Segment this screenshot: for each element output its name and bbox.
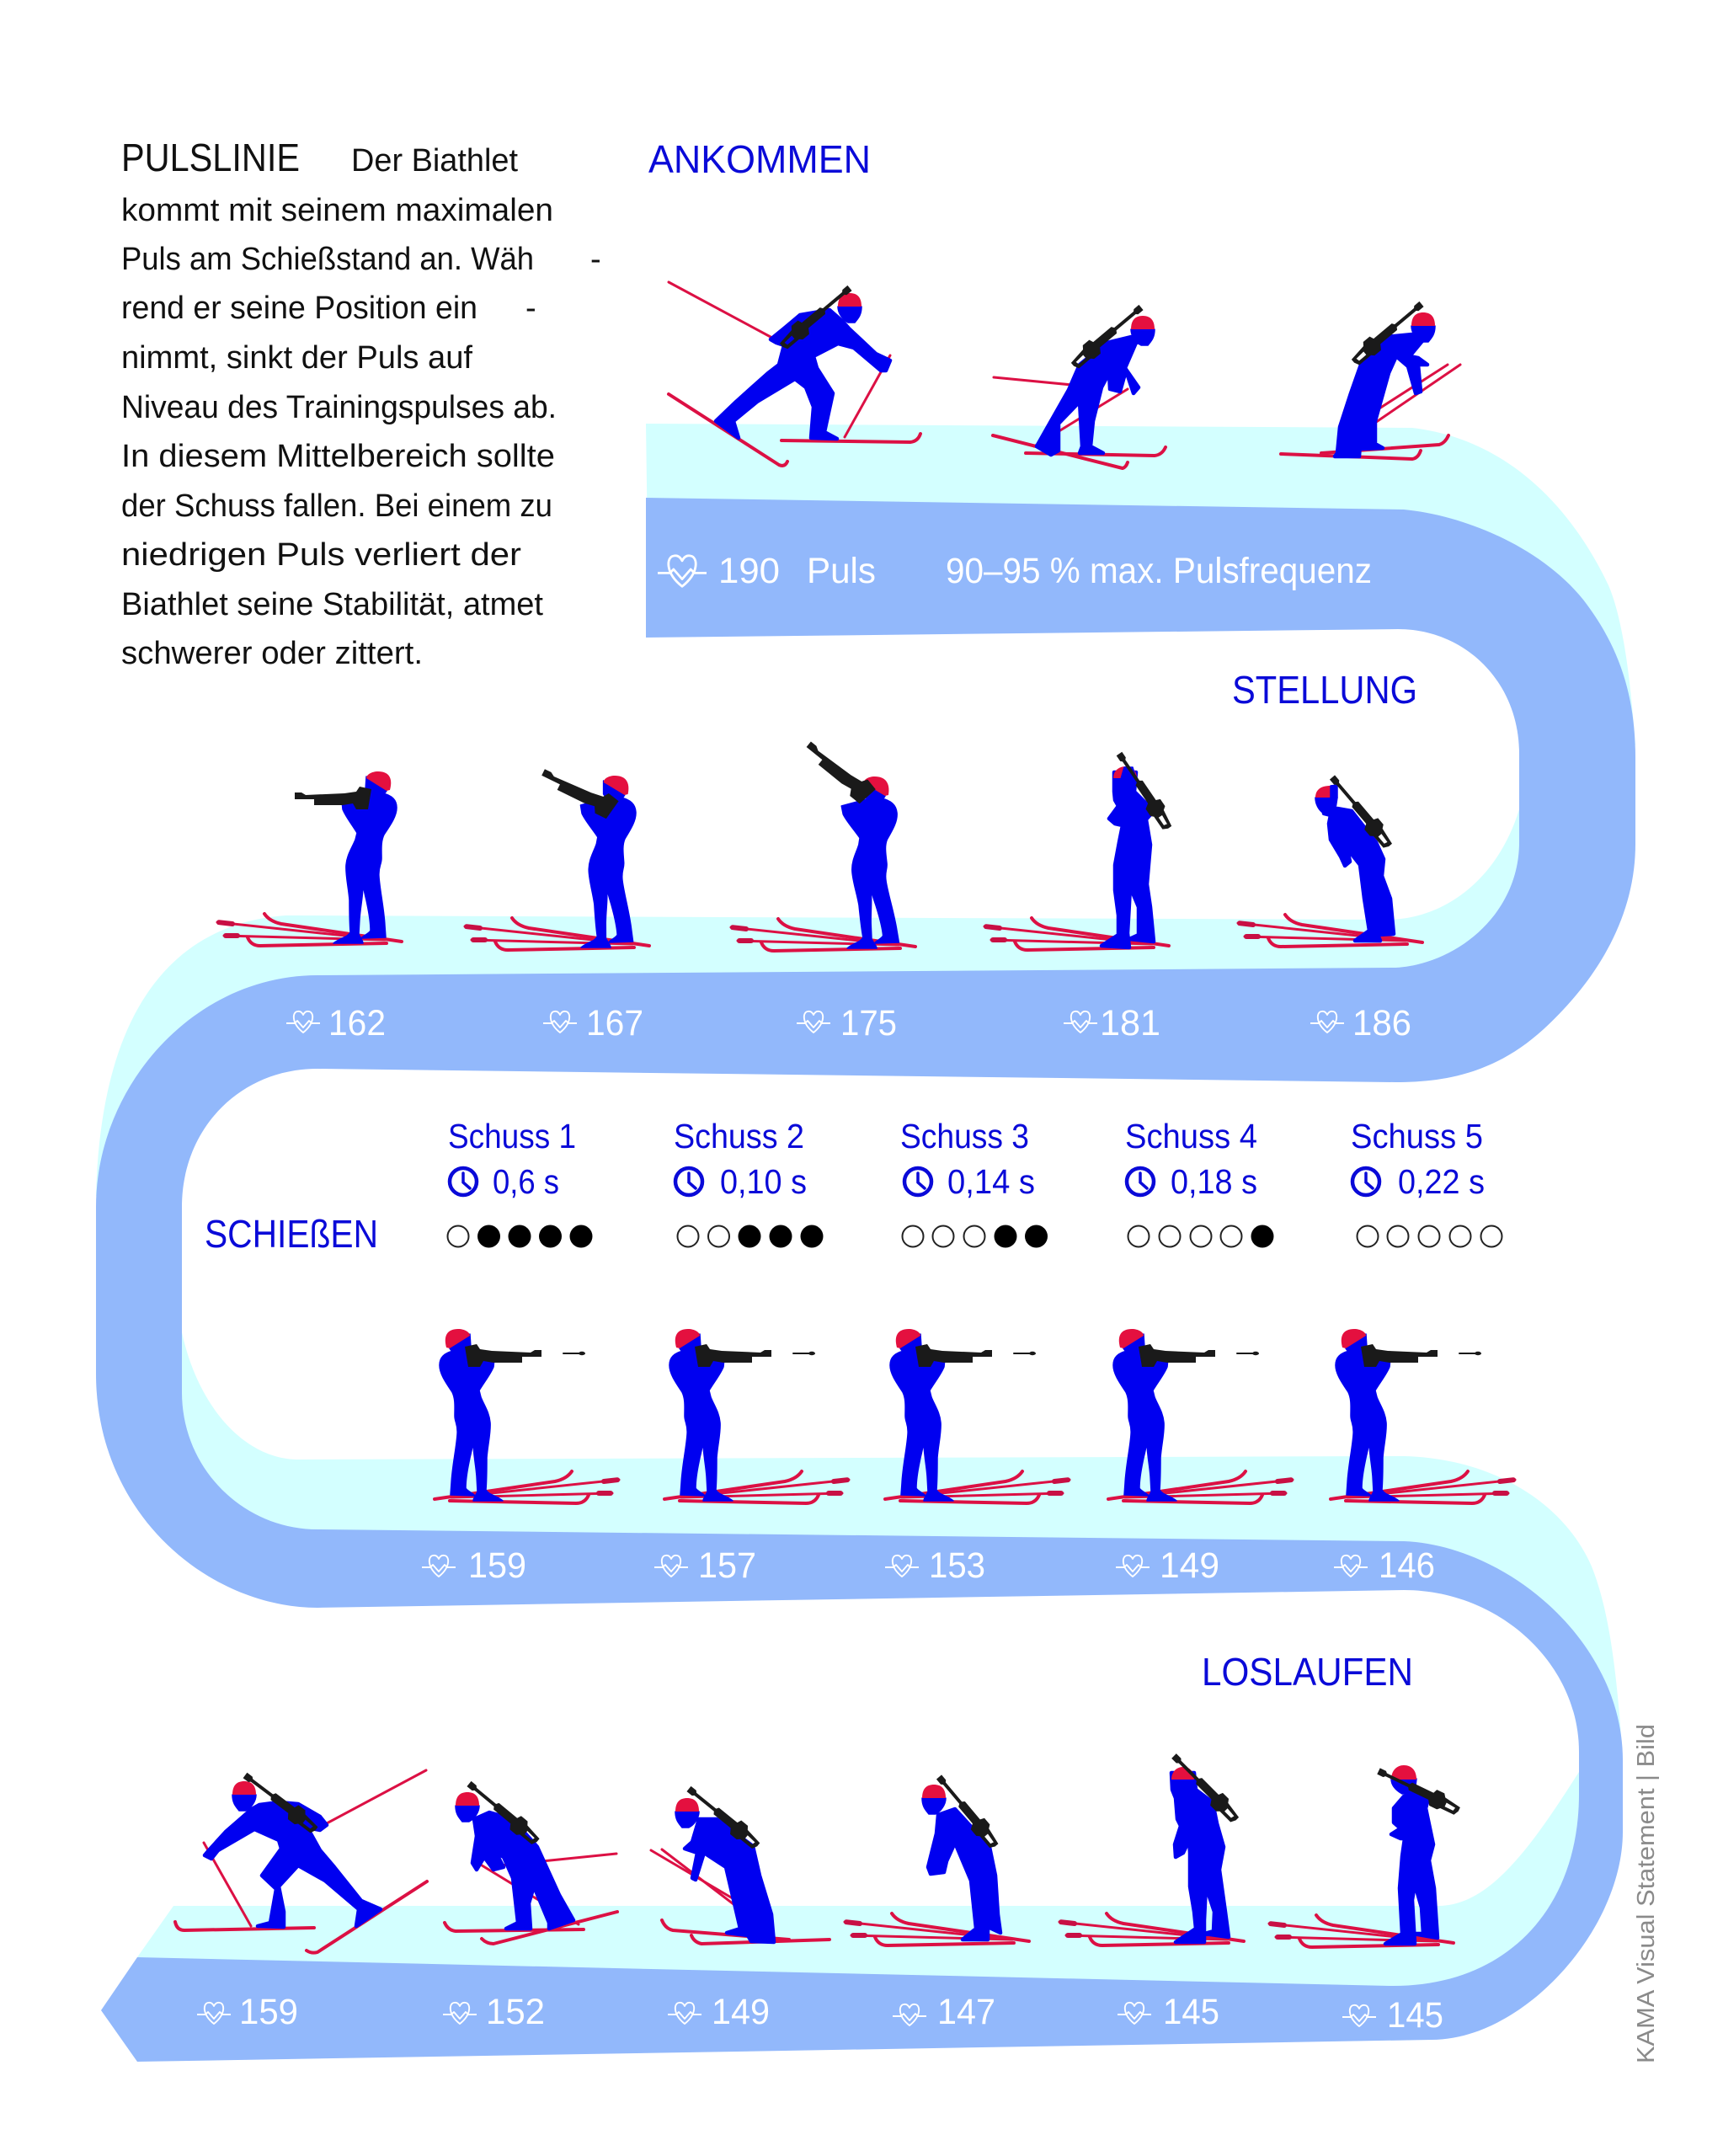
text block: Pulslinie: - [590,242,601,277]
shot 3 info: Schuss 3 [900,1117,1029,1155]
figure: positioning, leaning forward [1238,772,1422,947]
pulse label: 181 [1064,1003,1160,1043]
figure: departing skier 2 [445,1777,617,1944]
pulse label: 181: 181 [1100,1003,1160,1043]
shot 5 info: 0,22 s [1398,1162,1485,1201]
pulse label: 157: 157 [698,1545,756,1586]
pulse label: 186 [1310,1003,1411,1043]
pulse label: 149 end: 149 [712,1992,770,2032]
pulse label: 153 [885,1545,985,1586]
pulse label: 149 [1116,1545,1219,1586]
pulse label: 145: 145 [1163,1992,1219,2032]
shot 3 info [900,1117,1048,1248]
shot 2 info [674,1117,824,1248]
heading: Ankommen: ANKOMMEN [648,137,871,181]
pulse label: 190 Puls: 190 [718,551,780,591]
pulse label: 152 [443,1992,545,2032]
pulse label: 145 [1118,1992,1219,2032]
text block: Pulslinie: nimmt, sinkt der Puls auf [121,340,472,376]
shot 4 info: Schuss 4 [1125,1117,1257,1155]
text block: Pulslinie: In diesem Mittelbereich sollte [121,439,555,474]
pulse label: 167 [543,1003,643,1043]
shot 2 info: Schuss 2 [674,1117,804,1155]
text block: Pulslinie: niedrigen Puls verliert der [121,537,521,573]
text block: Pulslinie: rend er seine Position ein [121,291,477,326]
pulse label: 149 end [668,1992,770,2032]
pulse label: 157 [654,1545,756,1586]
heading: Schiessen: SCHIEßEN [205,1212,378,1256]
pulse label: 190 Puls: Puls [807,551,876,591]
figure: positioning, rifle raised [731,737,915,951]
figure: shooter 3 [885,1329,1070,1503]
pulse label: 152: 152 [486,1992,545,2032]
credit: KAMA Visual Statement | Bild [1633,1724,1660,2063]
pulse label: 146 [1334,1545,1435,1586]
text block: Pulslinie [121,136,601,671]
pulse label: 175 [797,1003,897,1043]
text block: Pulslinie: Der Biathlet [351,143,518,179]
figure: arriving skier 2 [993,301,1166,468]
pulse label: 159 end: 159 [239,1992,298,2032]
text block: Pulslinie: - [525,291,536,326]
figure: arriving skier 3 [1281,297,1460,459]
shot 5 info: Schuss 5 [1351,1117,1483,1155]
pulse label: 190 Puls: 90–95 % max. Pulsfrequenz [946,551,1372,591]
text block: Pulslinie: PULSLINIE [121,136,300,179]
figure: departing skier 6 [1269,1764,1463,1947]
text block: Pulslinie: der Schuss fallen. Bei einem zu [121,488,552,524]
figure: departing skier 1 [175,1769,427,1953]
shot 2 info: 0,10 s [720,1162,807,1201]
shot 4 info [1125,1117,1273,1248]
figure: positioning, rifle on shoulder [984,749,1176,950]
ribbon: pulse line band with arrow tip [96,498,1635,2062]
text block: Pulslinie: schwerer oder zittert. [121,636,423,671]
figure: shooter 5 [1331,1329,1515,1503]
shot 1 info: 0,6 s [493,1162,559,1201]
pulse label: 167: 167 [586,1003,643,1043]
pulse label: 147: 147 [937,1992,995,2032]
text block: Pulslinie: kommt mit seinem maximalen [121,193,553,228]
pulse label: 153: 153 [929,1545,985,1586]
shot 1 info [448,1117,593,1248]
pulse label: 190 Puls [658,551,1372,591]
pulse label: 149: 149 [1160,1545,1219,1586]
shot 1 info: Schuss 1 [448,1117,576,1155]
shot 4 info: 0,18 s [1171,1162,1257,1201]
pulse label: 162: 162 [328,1003,386,1043]
figure: arriving skier 1 [669,281,920,466]
figure: shooter 2 [664,1329,849,1503]
heading: Loslaufen: LOSLAUFEN [1202,1650,1413,1694]
pulse label: 159: 159 [468,1545,526,1586]
pulse label: 147 [893,1992,995,2032]
figure: departing skier 5 [1059,1750,1244,1945]
figure: positioning, rifle tilted [465,764,649,950]
heading: Stellung: STELLUNG [1232,668,1417,712]
figure: shooter 1 [435,1329,619,1503]
text block: Pulslinie: Puls am Schießstand an. Wäh [121,242,534,277]
shot 5 info [1351,1117,1502,1246]
figure: departing skier 4 [845,1772,1029,1945]
text block: Pulslinie: Niveau des Trainingspulses ab. [121,390,557,425]
figure: positioning, aiming level [217,771,402,946]
ribbon: light cyan ground [96,424,1635,2004]
pulse label: 159 end [197,1992,298,2032]
pulse label: 159 [422,1545,526,1586]
figure: departing skier 3 [651,1782,829,1944]
pulse label: 175: 175 [840,1003,897,1043]
pulse label: 145 last: 145 [1387,1995,1443,2036]
pulse label: 145 last [1342,1995,1443,2036]
pulse label: 162 [286,1003,386,1043]
pulse label: 186: 186 [1352,1003,1411,1043]
figure: shooter 4 [1108,1329,1293,1503]
text block: Pulslinie: Biathlet seine Stabilität, atmet [121,587,543,622]
pulse label: 146: 146 [1379,1545,1435,1586]
shot 3 info: 0,14 s [947,1162,1035,1201]
